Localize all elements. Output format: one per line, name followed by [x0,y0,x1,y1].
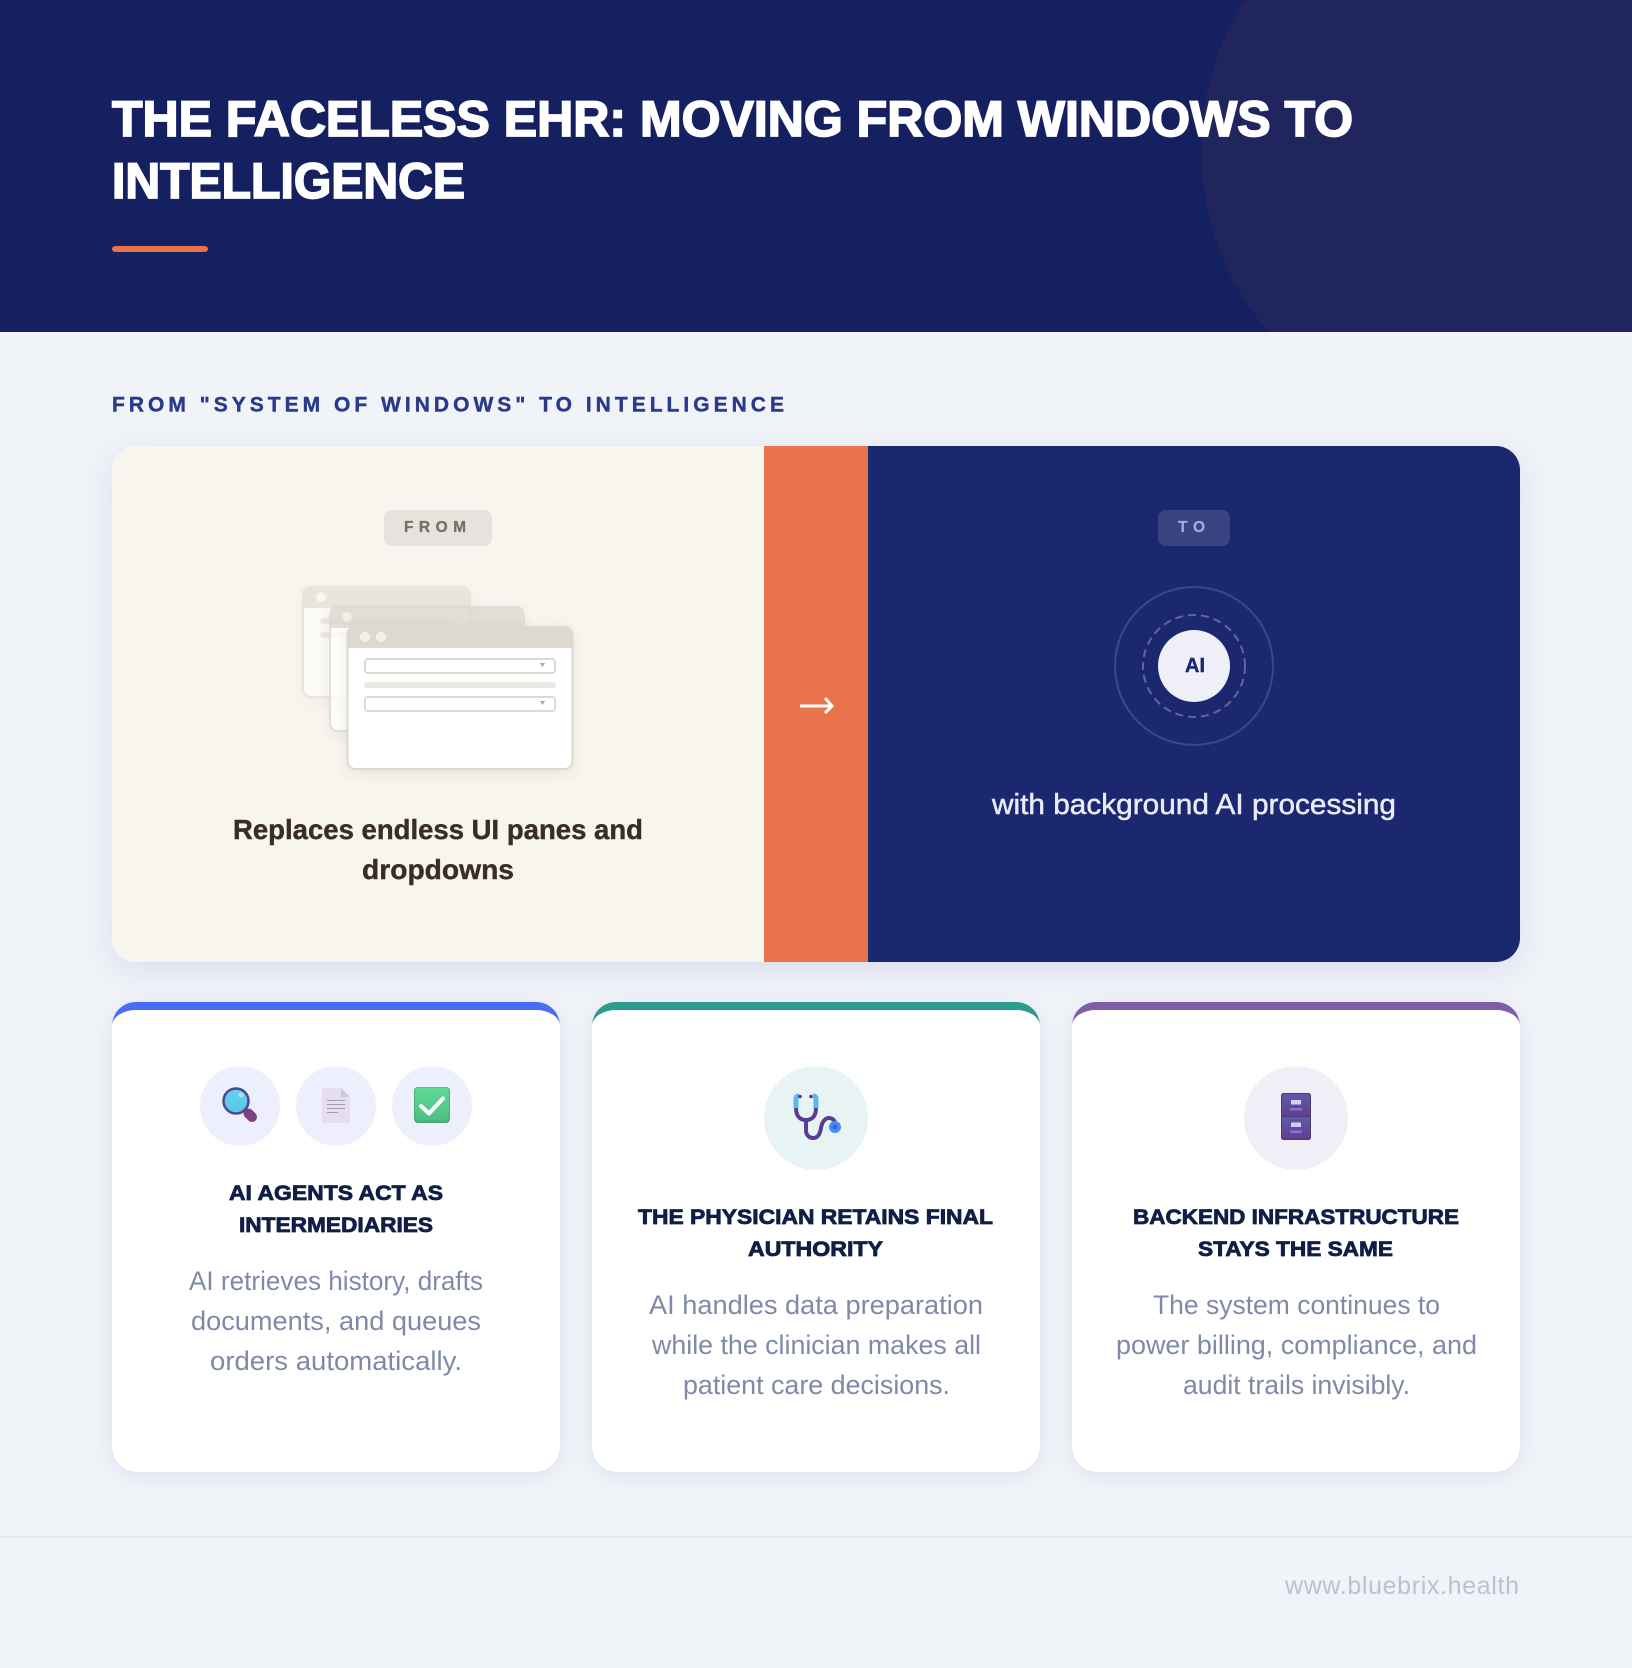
card body: AI retrieves history, drafts [189,1266,483,1296]
to badge [1158,510,1230,546]
title: INTELLIGENCE [112,153,465,209]
icon: AI rings: AI [1185,655,1205,677]
card body [649,1290,983,1400]
card heading: INTERMEDIARIES [239,1213,433,1237]
icon: filing cabinet [1244,1066,1348,1170]
card heading [638,1205,993,1261]
card body: while the clinician makes all [651,1330,981,1360]
header banner [0,0,1632,332]
card body: documents, and queues [191,1306,481,1336]
back window [302,586,470,697]
icon: checkbox [392,1066,472,1146]
arrow [800,698,832,713]
card heading: THE PHYSICIAN RETAINS FINAL [638,1205,993,1229]
icon: stacked windows [302,586,572,769]
card body: AI handles data preparation [649,1290,983,1320]
section heading: FROM "SYSTEM OF WINDOWS" TO INTELLIGENCE [112,394,784,416]
card body: The system continues to [1153,1290,1440,1320]
card heading [1133,1205,1459,1261]
arrow column [764,446,868,962]
panel: from background [112,446,764,962]
card heading [229,1181,443,1237]
from caption: dropdowns [362,854,514,885]
card heading: AUTHORITY [748,1237,883,1261]
from caption: Replaces endless UI panes and [233,814,643,845]
card heading: STAYS THE SAME [1198,1237,1393,1261]
icon: stethoscope [764,1066,868,1170]
title [112,91,1353,209]
from caption [233,814,643,885]
card body: patient care decisions. [683,1370,950,1400]
to badge: TO [1178,519,1205,536]
card body: orders automatically. [210,1346,462,1376]
title accent bar [112,246,208,252]
panel: to background [868,446,1520,962]
card body [189,1266,483,1376]
from badge: FROM [404,519,466,536]
footer url: www.bluebrix.health [1284,1572,1519,1600]
panel: AI agents card [112,1002,560,1472]
middle window [329,606,524,731]
to caption: with background AI processing [991,789,1396,821]
icon: magnifier [200,1066,280,1146]
card heading: AI AGENTS ACT AS [229,1181,443,1205]
from badge [384,510,492,546]
card body: power billing, compliance, and [1116,1330,1477,1360]
front window [346,626,572,769]
icon: AI rings [1115,587,1273,745]
card body: audit trails invisibly. [1183,1370,1410,1400]
panel: physician card [592,1002,1040,1472]
panel: backend card [1072,1002,1520,1472]
title: THE FACELESS EHR: MOVING FROM WINDOWS TO [112,91,1353,147]
header decorative circle [1201,0,1632,332]
card body [1116,1290,1477,1400]
card heading: BACKEND INFRASTRUCTURE [1133,1205,1459,1229]
icon: document [296,1066,376,1146]
comparison panel [112,446,1520,962]
